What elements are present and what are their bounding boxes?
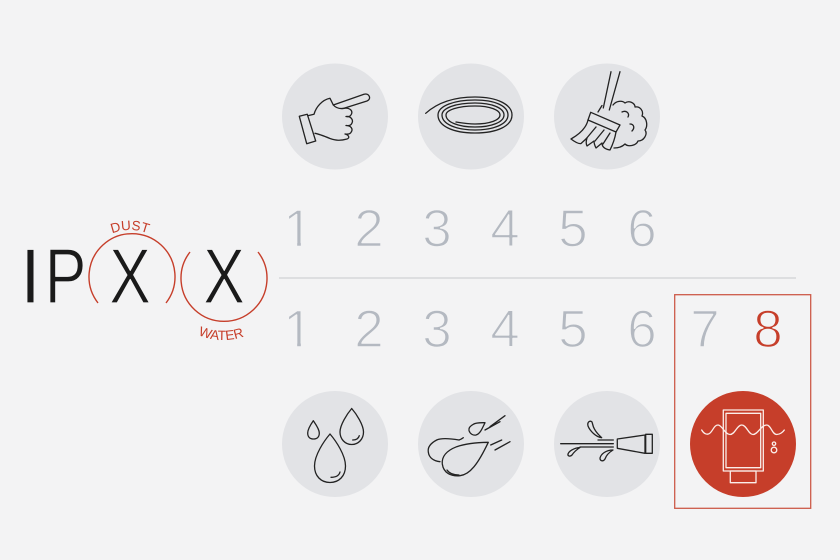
icon: water jet nozzle <box>554 391 660 497</box>
dust label: DUST <box>110 220 150 233</box>
IPXX logo <box>20 220 268 340</box>
dust arc <box>89 234 175 303</box>
water rating numbers: 6 <box>627 300 657 359</box>
highlight box <box>675 295 811 508</box>
dust rating numbers <box>283 200 657 258</box>
icon: driven rain drops <box>418 391 524 497</box>
dust rating numbers: 4 <box>490 200 520 258</box>
water label: WATER <box>200 326 244 340</box>
water rating numbers: 3 <box>422 300 452 359</box>
water arc <box>181 252 267 321</box>
icon: immersed device <box>690 391 796 497</box>
IP letters: I <box>20 232 41 320</box>
water rating numbers: 1 <box>283 300 313 359</box>
icon: pointing finger <box>282 64 388 170</box>
dust rating numbers: 6 <box>627 200 657 258</box>
dust rating numbers: 5 <box>558 200 588 258</box>
icon: dripping water drops <box>282 391 388 497</box>
IP letters: P <box>45 232 86 320</box>
first X: dust digit: X <box>109 232 151 320</box>
icon: coiled wire <box>418 64 524 170</box>
highlight number 8: 8 <box>753 300 783 359</box>
IP letters <box>20 232 86 320</box>
dust rating numbers: 2 <box>354 200 384 258</box>
icon: broom and dust <box>554 64 660 170</box>
second X: water digit: X <box>203 232 245 320</box>
water rating numbers: 2 <box>354 300 384 359</box>
water rating numbers <box>283 300 720 359</box>
water rating numbers: 4 <box>490 300 520 359</box>
water rating numbers: 5 <box>558 300 588 359</box>
divider line <box>279 277 796 279</box>
water rating numbers: 7 <box>690 300 720 359</box>
dust rating numbers: 1 <box>283 200 313 258</box>
dust rating numbers: 3 <box>422 200 452 258</box>
